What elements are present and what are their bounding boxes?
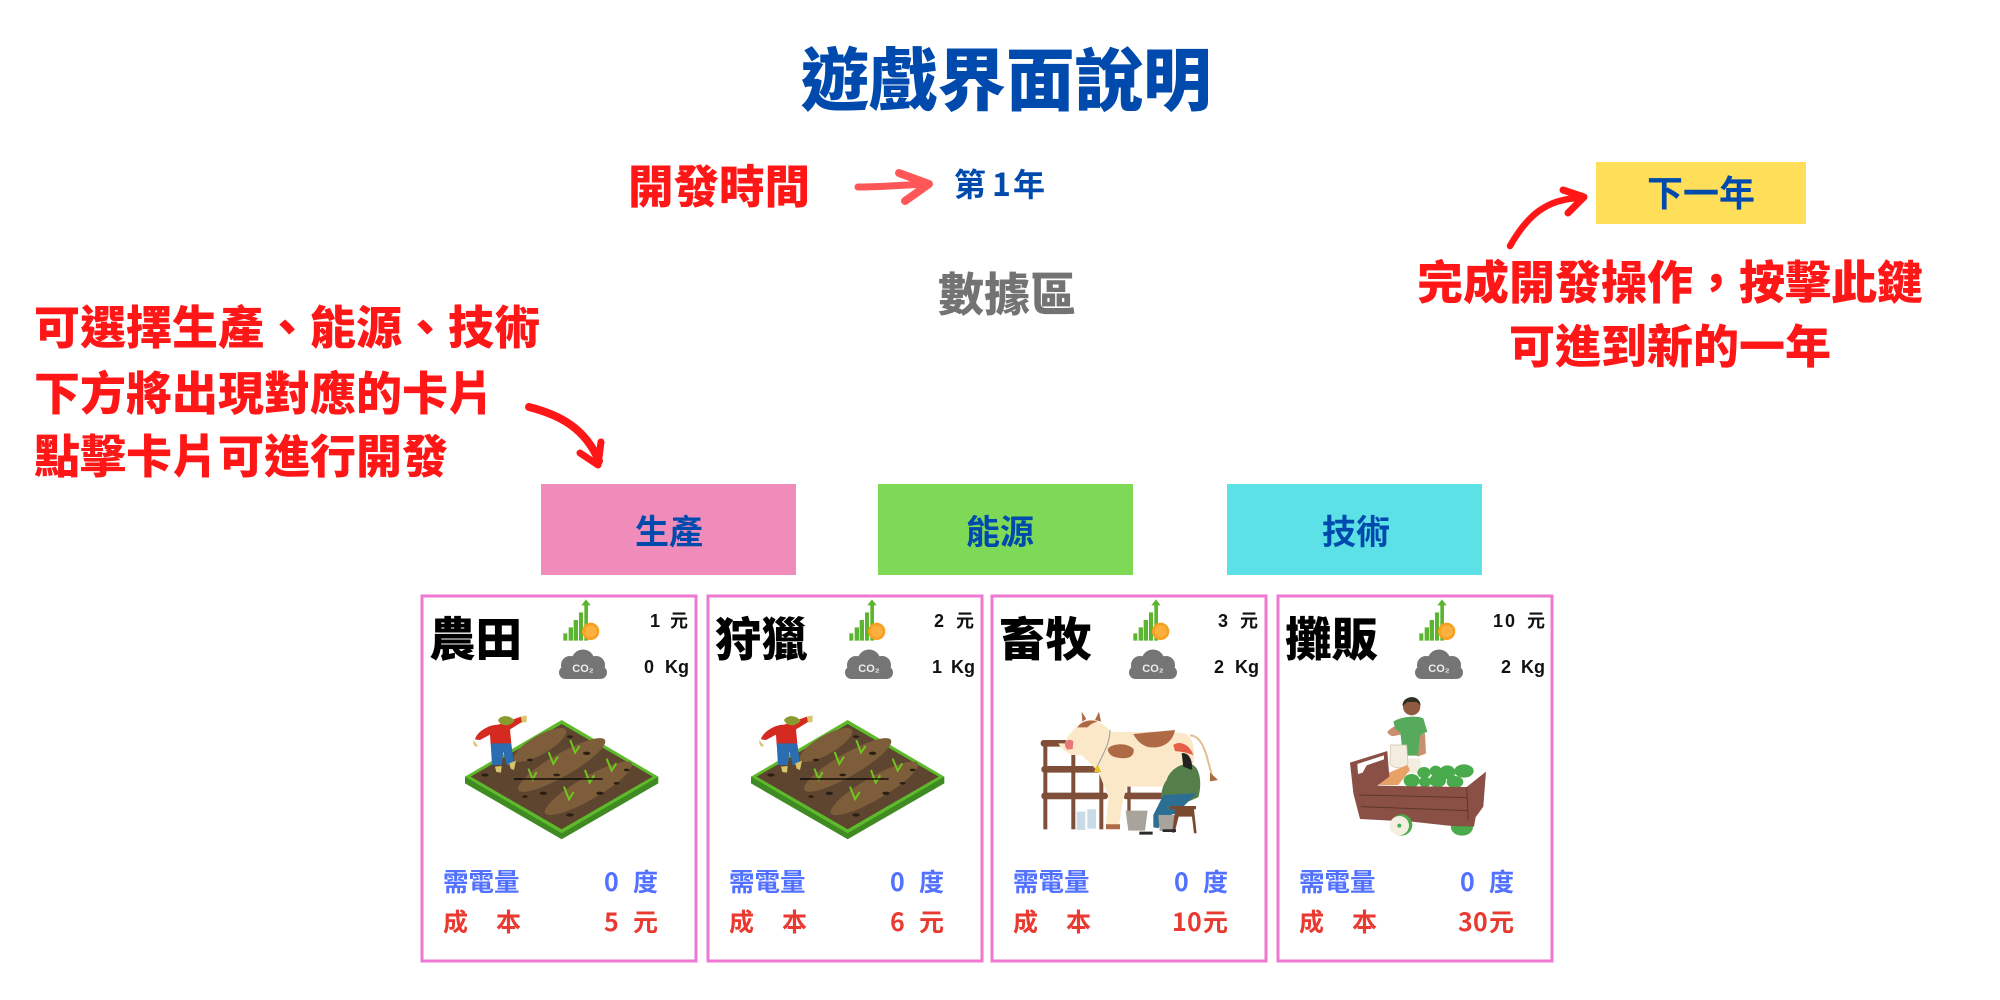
- cost: [1013, 903, 1228, 939]
- electricity requirement: 0度: [1174, 863, 1228, 899]
- icon: CO2 cloud: CO₂: [1428, 663, 1450, 675]
- electricity requirement: 需電量: [1013, 862, 1090, 899]
- icon: income chart: [563, 599, 599, 641]
- tab: energy: 能源: [966, 505, 1034, 554]
- icon: income chart: [1133, 599, 1169, 641]
- income value: 10元: [1493, 611, 1545, 631]
- icon: CO2 cloud: [1415, 650, 1463, 679]
- icon: income chart: [849, 599, 885, 641]
- year indicator: 第1年: [954, 160, 1045, 206]
- illustration: cow and milker: [1041, 712, 1218, 835]
- tab: energy: [878, 484, 1133, 575]
- cost: 成本: [1299, 903, 1377, 939]
- note: next year instructions: [1417, 247, 1923, 377]
- emission value: 0Kg: [644, 657, 689, 677]
- emission value: 1Kg: [932, 657, 975, 677]
- icon: CO2 cloud: [1129, 650, 1177, 679]
- cost: [729, 903, 944, 939]
- icon: income chart: [1419, 599, 1455, 641]
- note: category instructions: 下方將出現對應的卡片: [34, 358, 494, 424]
- cost: 5元: [604, 903, 658, 939]
- arrow: to next year button: [1510, 190, 1584, 246]
- tab: production: [541, 484, 796, 575]
- electricity requirement: 需電量: [1299, 862, 1376, 899]
- cost: [443, 903, 658, 939]
- electricity requirement: 需電量: [729, 862, 806, 899]
- icon: CO2 cloud: CO₂: [572, 663, 594, 675]
- cost: 30元: [1458, 903, 1514, 939]
- cost: 10元: [1172, 903, 1228, 939]
- arrow: time to year: [858, 173, 929, 201]
- electricity requirement: 0度: [1460, 863, 1514, 899]
- income value: 2元: [934, 611, 974, 631]
- icon: CO2 cloud: [845, 650, 893, 679]
- tab: technology: 技術: [1322, 505, 1390, 554]
- icon: CO2 cloud: CO₂: [858, 663, 880, 675]
- label: development time: 開發時間: [628, 151, 810, 217]
- note: category instructions: 點擊卡片可進行開發: [34, 421, 448, 487]
- note: next year instructions: 可進到新的一年: [1509, 311, 1831, 377]
- cost: [1299, 903, 1514, 939]
- arrow: to tabs: [529, 407, 601, 465]
- data area label: 數據區: [938, 259, 1076, 325]
- illustration: vendor cart: [1350, 697, 1486, 836]
- emission value: 2Kg: [1501, 657, 1545, 677]
- cost: 成本: [1013, 903, 1091, 939]
- note: category instructions: [34, 292, 540, 487]
- icon: CO2 cloud: [559, 650, 607, 679]
- cost: 成本: [443, 903, 521, 939]
- tab: production: 生產: [635, 505, 703, 554]
- electricity requirement: 0度: [604, 863, 658, 899]
- card: livestock: [992, 596, 1266, 961]
- income value: 3元: [1218, 611, 1258, 631]
- cost: 成本: [729, 903, 807, 939]
- card: street vending: [1278, 596, 1552, 961]
- electricity requirement: [729, 862, 944, 899]
- electricity requirement: 需電量: [443, 862, 520, 899]
- note: category instructions: 可選擇生產、能源、技術: [34, 292, 540, 358]
- card title: 狩獵: [715, 603, 808, 670]
- cost: 6元: [890, 903, 944, 939]
- illustration: field: [465, 715, 658, 839]
- icon: CO2 cloud: CO₂: [1142, 663, 1164, 675]
- card: farmland: [422, 596, 696, 961]
- title: 遊戲界面說明: [800, 26, 1212, 125]
- note: next year instructions: 完成開發操作，按擊此鍵: [1417, 247, 1923, 313]
- card title: 攤販: [1285, 603, 1378, 670]
- electricity requirement: [1013, 862, 1228, 899]
- card: hunting: [708, 596, 982, 961]
- income value: 1元: [650, 611, 688, 631]
- illustration: field: [751, 715, 944, 839]
- emission value: 2Kg: [1214, 657, 1259, 677]
- card title: 畜牧: [999, 603, 1092, 670]
- card title: 農田: [429, 603, 522, 670]
- electricity requirement: [1299, 862, 1514, 899]
- electricity requirement: 0度: [890, 863, 944, 899]
- next year button: [1596, 162, 1806, 224]
- tab: technology: [1227, 484, 1482, 575]
- electricity requirement: [443, 862, 658, 899]
- next year button: 下一年: [1647, 165, 1755, 217]
